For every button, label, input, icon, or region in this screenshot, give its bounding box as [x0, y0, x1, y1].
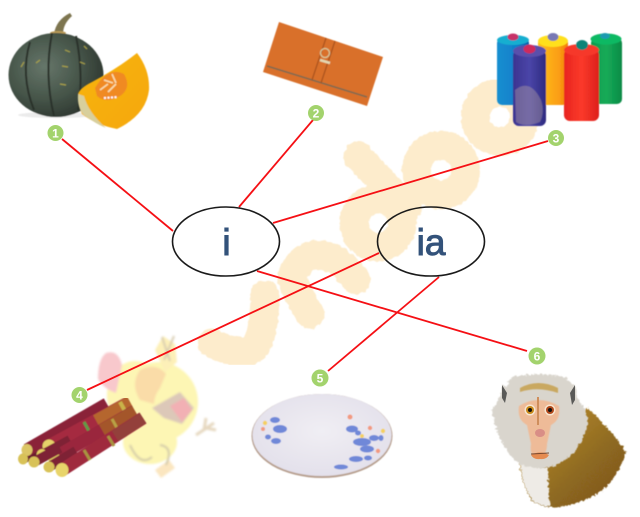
image: monkey: [492, 374, 626, 507]
spool: yellow: [538, 33, 568, 105]
ellipse: i: [172, 207, 280, 276]
badge 1: 1: [52, 126, 59, 140]
badge 6: [528, 348, 546, 364]
line 2 to i: [239, 120, 313, 207]
flowers: right: [334, 414, 385, 470]
badge 4: [72, 387, 88, 403]
spool: purple: [513, 44, 546, 126]
ellipse: ia: [378, 207, 484, 276]
badge 5: [312, 370, 328, 386]
image: sugarcane bundle: [18, 402, 143, 477]
line 5 to ia: [328, 277, 439, 371]
line 3 to i: [273, 141, 548, 223]
badge 2: 2: [313, 106, 320, 120]
watermark mascot: chick: [98, 336, 216, 478]
spool: red: [564, 40, 599, 121]
image: wallet: [263, 22, 383, 106]
spool: green: [590, 33, 622, 104]
image: pumpkin slice: [78, 53, 149, 129]
badge 3: [548, 130, 564, 146]
badge 4: 4: [76, 388, 83, 402]
connector lines: [62, 120, 548, 390]
ellipse: i: i: [222, 222, 231, 263]
image: thread spools: [497, 33, 622, 126]
watermark letters: [212, 92, 524, 352]
image: plate: [252, 394, 392, 478]
badge 6: 6: [534, 350, 541, 364]
line 1 to i: [62, 139, 173, 231]
badge 1: [48, 125, 64, 141]
image: pumpkin: [8, 13, 104, 118]
number badges: [48, 105, 564, 403]
line 4 to ia: [87, 253, 379, 390]
line 6 to i: [257, 271, 527, 351]
badge 3: 3: [553, 132, 560, 146]
badge 5: 5: [317, 372, 324, 386]
badge 2: [308, 105, 324, 121]
flowers: left: [261, 417, 287, 444]
ellipse: ia: ia: [417, 222, 446, 263]
spool: blue: [497, 34, 529, 105]
